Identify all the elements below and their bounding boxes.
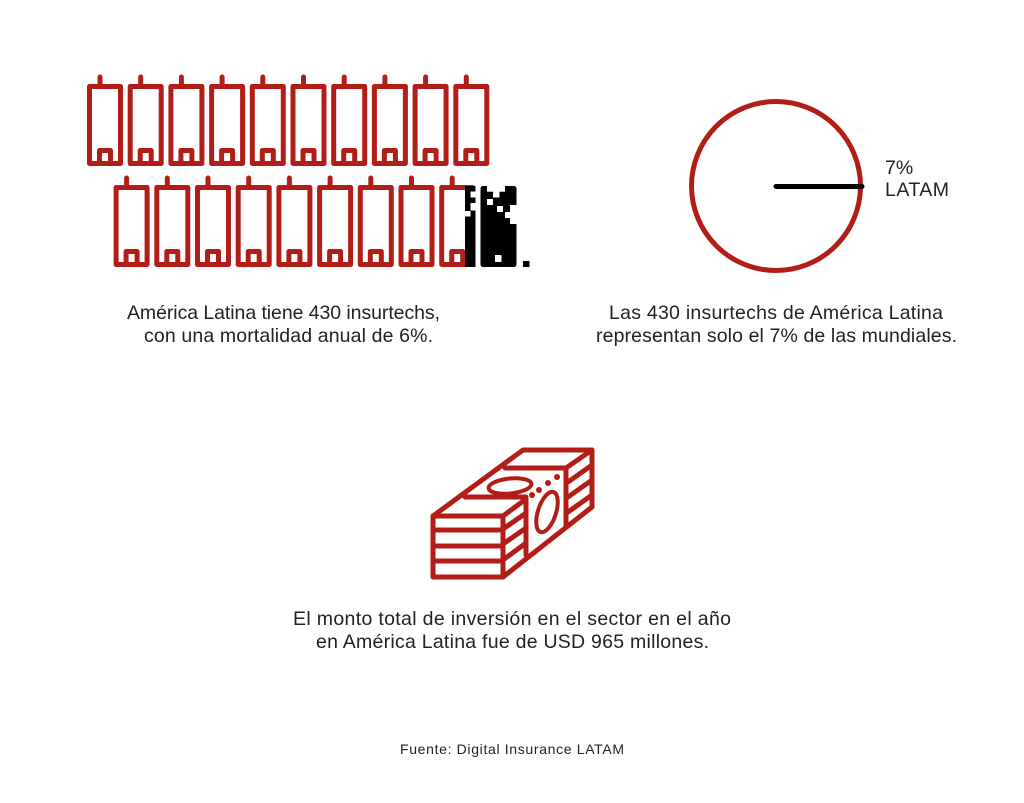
icon row 1: ten red buildings <box>90 77 487 164</box>
icon row 2: nine red buildings and one partial <box>116 178 473 264</box>
text: share caption: Las 430 insurtechs de América Latina <box>609 302 943 324</box>
text: share caption: representan solo el 7% de las mundiales. <box>596 325 957 347</box>
text: investment caption: en América Latina fue de USD 965 millones. <box>316 631 709 653</box>
chart label: 7% LATAM: 7% <box>885 157 913 179</box>
text: investment caption: El monto total de inversión en el sector en el año <box>293 608 731 630</box>
text: source: Fuente: Digital Insurance LATAM <box>400 741 624 757</box>
period mark <box>523 261 530 267</box>
text: mortality caption: con una mortalidad anual de 6%. <box>144 325 433 347</box>
icon: black pixelated glitch block <box>465 185 517 267</box>
panel: insurtech icon rows <box>90 77 530 267</box>
chart: share circle <box>692 102 862 270</box>
icon: stack of banknotes <box>433 450 592 577</box>
chart label: 7% LATAM: LATAM <box>885 179 949 201</box>
text: mortality caption: América Latina tiene 430 insurtechs, <box>127 302 440 324</box>
